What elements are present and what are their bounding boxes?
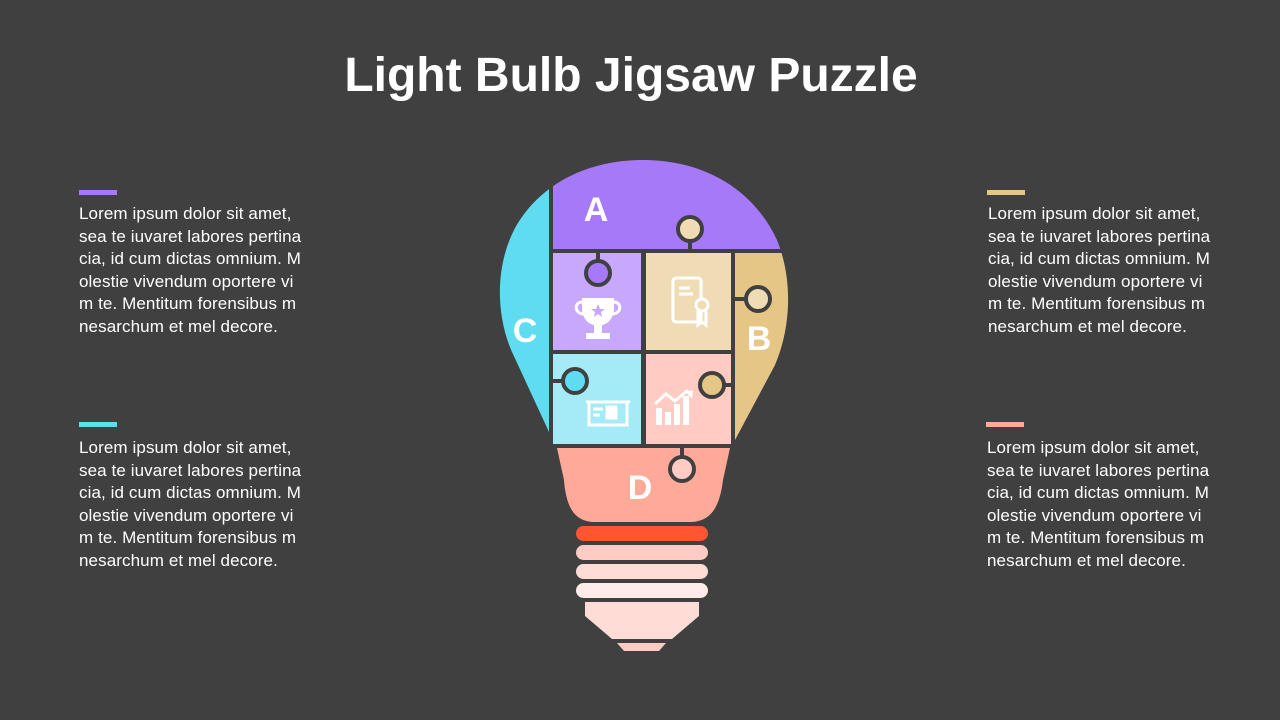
icon: growth chart	[655, 390, 693, 425]
text block: top right: cia, id cum dictas omnium. M	[988, 249, 1210, 268]
inner tiles	[553, 253, 641, 350]
text block: top right: nesarchum et mel decore.	[988, 316, 1187, 336]
text block: top right: olestie vivendum oportere vi	[988, 272, 1202, 290]
piece A	[553, 160, 780, 249]
text block: bottom right: nesarchum et mel decore.	[987, 550, 1186, 570]
text block: bottom right: olestie vivendum oportere vi	[987, 506, 1201, 524]
light bulb puzzle	[500, 160, 788, 651]
text block: bottom left: olestie vivendum oportere vi	[79, 506, 293, 524]
text block: bottom right: Lorem ipsum dolor sit amet,	[987, 438, 1199, 457]
text block: bottom left: m te. Mentitum forensibus m	[79, 528, 296, 547]
piece C	[500, 189, 549, 432]
text block: bottom left: cia, id cum dictas omnium. M	[79, 483, 301, 502]
connectors	[549, 217, 770, 481]
icon: certificate	[673, 278, 708, 325]
text block: bottom right	[986, 422, 1210, 570]
text block: top right: Lorem ipsum dolor sit amet,	[988, 204, 1200, 223]
text block: top left	[79, 190, 302, 336]
text block: bottom right: cia, id cum dictas omnium. M	[987, 483, 1209, 502]
text block: bottom left: nesarchum et mel decore.	[79, 550, 278, 570]
bulb base cap	[585, 602, 699, 639]
text block: bottom left: sea te iuvaret labores pertina	[79, 460, 301, 480]
text block: top right: m te. Mentitum forensibus m	[988, 294, 1205, 313]
bulb base bands	[576, 526, 708, 541]
text block: top right: sea te iuvaret labores pertina	[988, 226, 1210, 246]
text block: top left: nesarchum et mel decore.	[79, 316, 278, 336]
piece B	[735, 253, 788, 440]
letters: B	[747, 320, 771, 358]
letters: D	[628, 469, 652, 507]
text block: top left: sea te iuvaret labores pertina	[79, 226, 301, 246]
text block: bottom right: m te. Mentitum forensibus m	[987, 528, 1204, 547]
letters: C	[513, 312, 537, 350]
text block: top left: Lorem ipsum dolor sit amet,	[79, 204, 291, 223]
text block: bottom right: sea te iuvaret labores pertina	[987, 460, 1209, 480]
icon: trophy	[576, 298, 620, 339]
piece D	[557, 448, 730, 522]
letters	[513, 191, 771, 507]
text block: top left: m te. Mentitum forensibus m	[79, 294, 296, 313]
icon: presentation board	[586, 402, 630, 425]
text block: bottom left	[79, 422, 302, 570]
text block: top right	[987, 190, 1210, 336]
text block: top left: olestie vivendum oportere vi	[79, 272, 293, 290]
text block: top left: cia, id cum dictas omnium. M	[79, 249, 301, 268]
letters: A	[584, 191, 608, 229]
title: Light Bulb Jigsaw Puzzle	[344, 49, 918, 102]
text block: bottom left: Lorem ipsum dolor sit amet,	[79, 438, 291, 457]
